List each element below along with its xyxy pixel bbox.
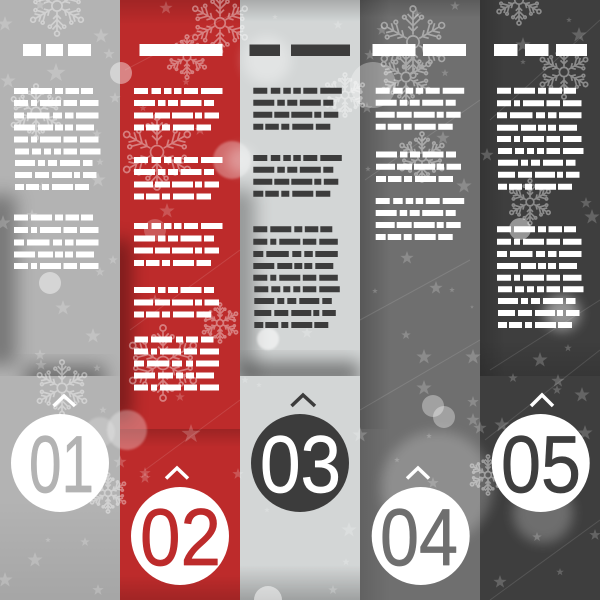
- panel: column 2 background: [110, 0, 240, 600]
- diagonal light streaks: [125, 10, 600, 600]
- heading placeholder 4: [372, 44, 466, 56]
- column 2 content: [131, 44, 229, 585]
- text block 4.3: [376, 201, 464, 237]
- panel: column 5 background: [480, 0, 600, 600]
- panel: column 1 background: [0, 0, 120, 600]
- text block 3.1: [253, 91, 342, 127]
- text block 2.5: [134, 340, 219, 388]
- chevron 2: [166, 468, 188, 478]
- column 3 content: [250, 44, 350, 512]
- text block 3.2: [253, 158, 342, 194]
- column 1 content: [11, 44, 109, 512]
- text block 2.1: [134, 91, 222, 128]
- badge 05: 05: [501, 420, 581, 510]
- text block 5.2: [497, 229, 584, 325]
- panel: column 3 background: [240, 0, 360, 600]
- chevron 5: [531, 395, 553, 406]
- heading placeholder 5: [494, 44, 587, 56]
- text block 2.3: [134, 226, 222, 263]
- panel: column 4 background: [360, 0, 480, 600]
- text block 1.1: [14, 91, 100, 187]
- heading placeholder 2: [140, 44, 222, 56]
- text block 4.2: [376, 154, 461, 179]
- text block 3.3: [253, 229, 340, 325]
- text block 5.1: [497, 91, 584, 187]
- heading placeholder 1: [23, 44, 91, 56]
- chevron 4: [407, 468, 429, 478]
- chevron 3: [292, 395, 315, 406]
- text block 2.4: [134, 290, 219, 314]
- text block 1.2: [14, 218, 98, 266]
- badge 02: 02: [140, 493, 221, 583]
- text block 4.1: [376, 91, 464, 127]
- chevron 1: [54, 396, 75, 406]
- badge 03: 03: [260, 420, 341, 510]
- badge 01: 01: [29, 420, 94, 510]
- badge 04: 04: [380, 493, 458, 583]
- column 4 content: [372, 44, 470, 585]
- badge 01: [11, 414, 109, 512]
- heading placeholder 3: [250, 44, 350, 56]
- column 5 content: [492, 44, 590, 512]
- text block 2.2: [134, 160, 222, 196]
